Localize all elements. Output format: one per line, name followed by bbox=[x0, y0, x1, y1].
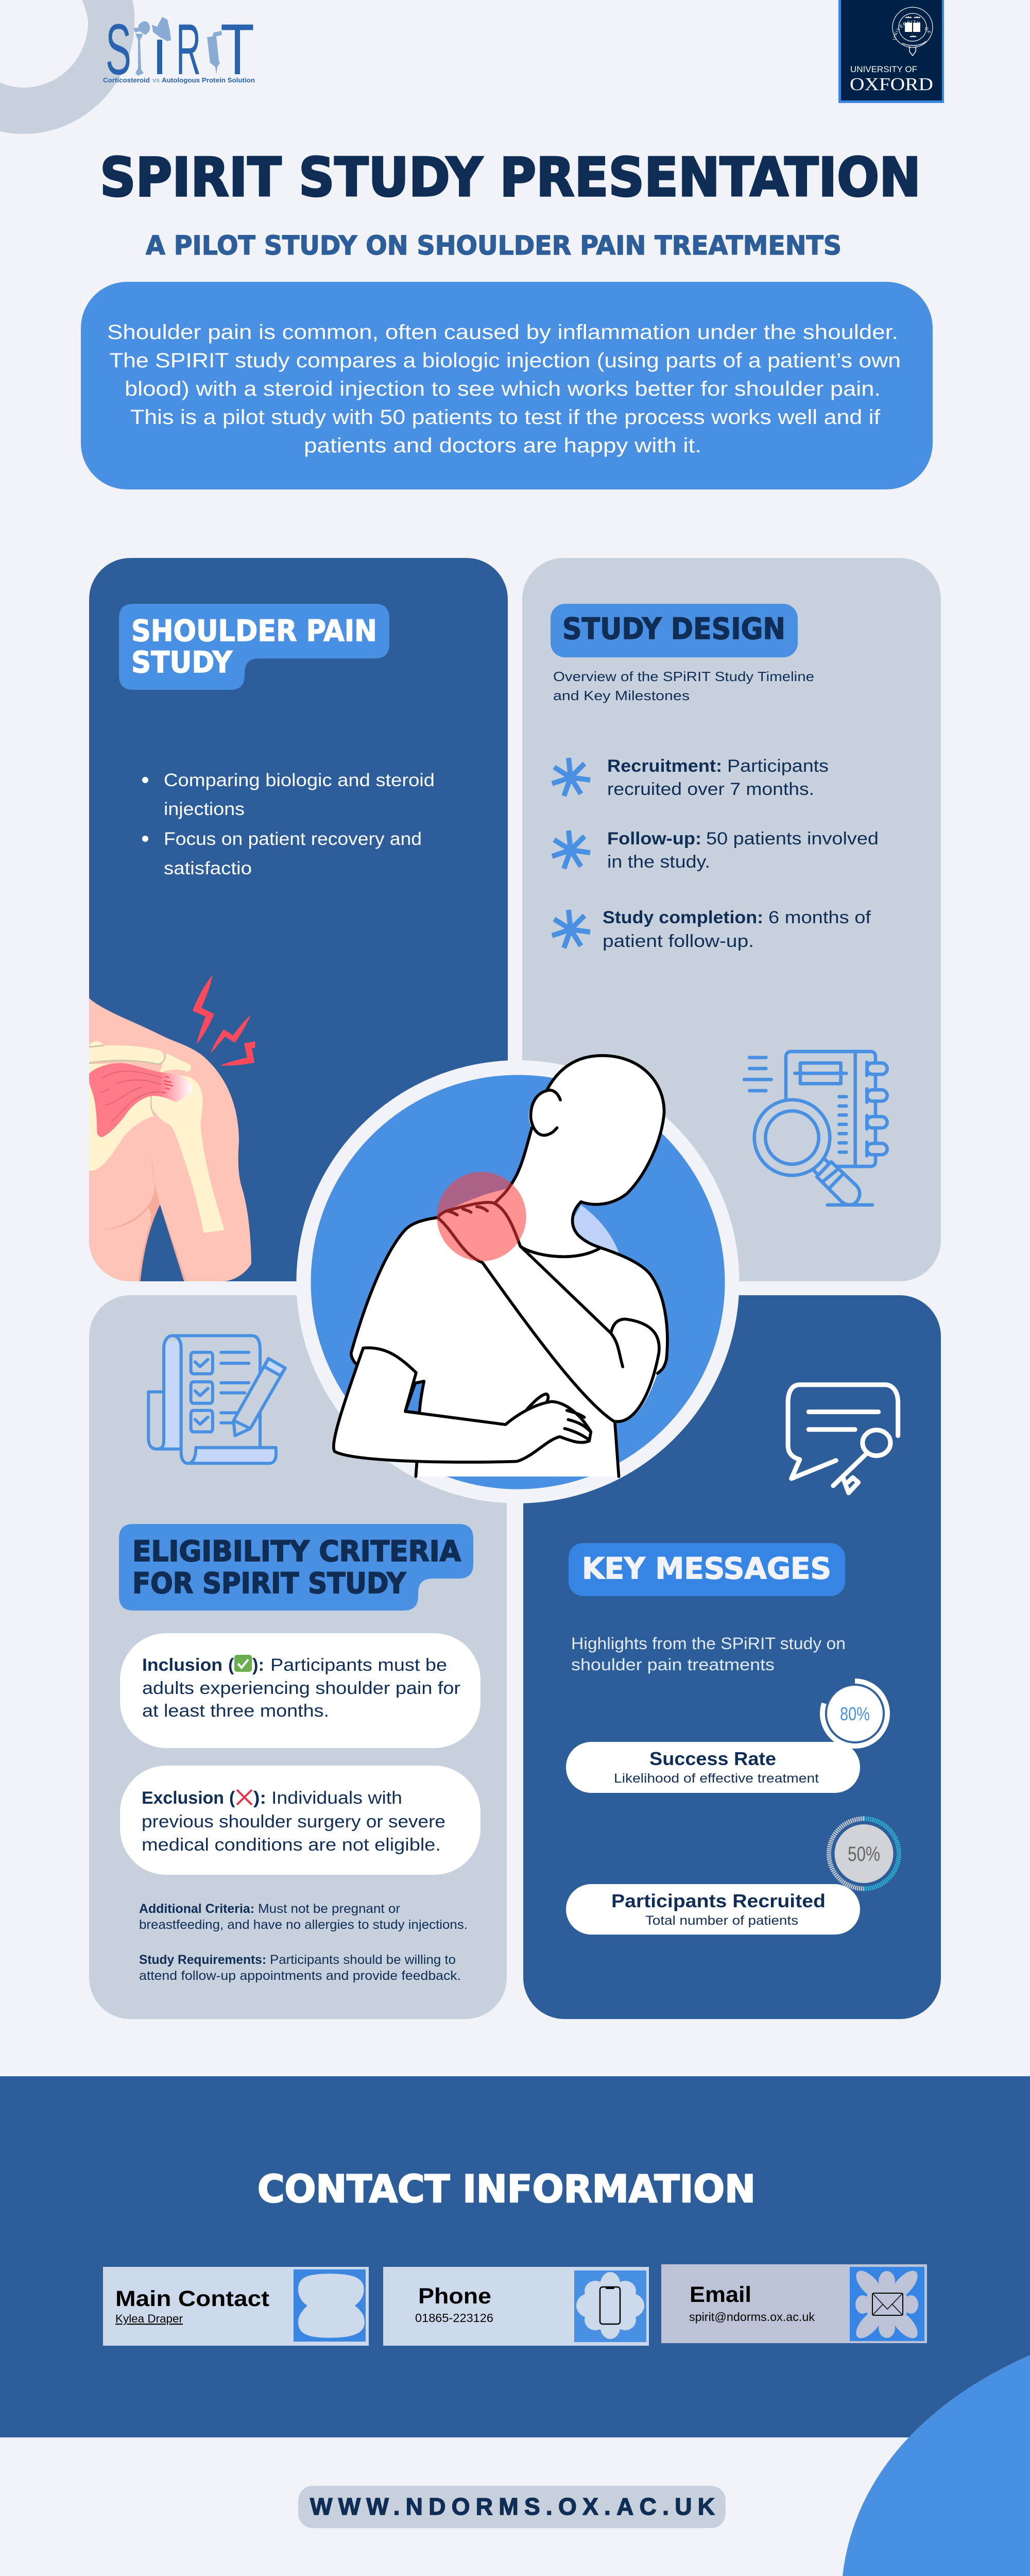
icon: speech bubble with key bbox=[788, 1385, 898, 1493]
study design intro text: and Key Milestones bbox=[553, 688, 690, 703]
card: email: spirit@ndorms.ox.ac.uk bbox=[689, 2310, 815, 2324]
icon: asterisk study completion bbox=[552, 910, 590, 948]
callout: exclusion: Exclusion bbox=[142, 1788, 224, 1808]
panel: shoulder pain study bbox=[77, 558, 508, 1281]
text: study completion: Study completion: bbox=[603, 908, 763, 927]
bullet list: injections bbox=[164, 799, 245, 819]
heading: key messages bbox=[569, 1543, 845, 1596]
website link bbox=[298, 2486, 726, 2528]
icon: red cross bbox=[237, 1790, 252, 1805]
text: follow-up: 50 patients involved bbox=[706, 829, 879, 849]
icon: two lobed shape bbox=[298, 2274, 365, 2338]
icon: checklist and pencil bbox=[148, 1335, 285, 1463]
text: study completion: 6 months of bbox=[768, 908, 871, 927]
stat: participants recruited: Participants Recruited bbox=[611, 1890, 826, 1911]
text: study requirements bbox=[139, 1953, 461, 1983]
callout: inclusion: adults experiencing shoulder pain for bbox=[142, 1679, 460, 1698]
heading: study design bbox=[551, 604, 798, 657]
heading: shoulder pain study bbox=[119, 604, 389, 690]
bullet list: satisfactio bbox=[164, 858, 252, 878]
text: recruitment: Participants bbox=[727, 756, 829, 776]
logo: SPIRIT: vs bbox=[152, 76, 160, 84]
bullet list: Comparing biologic and steroid bbox=[164, 770, 435, 790]
panel: eligibility criteria bbox=[89, 1295, 507, 2019]
card: phone: Phone bbox=[418, 2284, 491, 2309]
text: study requirements: Study Requirements: bbox=[139, 1953, 266, 1967]
callout: inclusion: Participants must be bbox=[270, 1655, 447, 1675]
heading: key messages: KEY MESSAGES bbox=[582, 1552, 831, 1586]
logo: SPIRIT: Autologous Protein Solution bbox=[162, 76, 255, 84]
study design intro text bbox=[553, 669, 814, 703]
stat: success rate bbox=[566, 1742, 860, 1793]
decorative ring top left bbox=[0, 0, 134, 134]
text: additional criteria: Must not be pregnant or bbox=[258, 1902, 400, 1916]
callout: exclusion: medical conditions are not eligible. bbox=[142, 1835, 441, 1855]
heading: shoulder pain study: SHOULDER PAIN bbox=[131, 614, 377, 648]
text: study completion bbox=[603, 908, 871, 951]
intro callout: blood) with a steroid injection to see which works better for shoulder pain. bbox=[125, 378, 881, 400]
gauge: 50 percent bbox=[829, 1819, 899, 1889]
text: additional criteria bbox=[139, 1902, 468, 1932]
callout: inclusion bbox=[120, 1633, 480, 1748]
callout: exclusion: ): bbox=[253, 1788, 266, 1808]
gauge: 80 percent: 80% bbox=[840, 1703, 870, 1724]
text: follow-up: in the study. bbox=[607, 852, 710, 872]
text: study requirements: attend follow-up appointments and provide feedback. bbox=[139, 1969, 461, 1983]
text: study completion: patient follow-up. bbox=[603, 931, 754, 951]
card: main contact: Kylea Draper bbox=[115, 2312, 183, 2325]
text: highlights bbox=[571, 1634, 846, 1674]
intro callout: Shoulder pain is common, often caused by inflammation under the shoulder. bbox=[107, 321, 898, 344]
text: follow-up bbox=[607, 829, 879, 872]
text: highlights: shoulder pain treatments bbox=[571, 1655, 775, 1674]
logo: SPIRIT bbox=[103, 9, 255, 90]
heading: shoulder pain study: STUDY bbox=[131, 646, 233, 680]
icon: asterisk recruitment bbox=[552, 758, 590, 796]
panel: study design bbox=[522, 558, 941, 1281]
decorative blue shape bottom right bbox=[843, 2355, 1030, 2576]
card: email: Email bbox=[690, 2282, 751, 2307]
figure: person holding shoulder bbox=[334, 1056, 667, 1477]
heading: eligibility criteria bbox=[119, 1524, 473, 1611]
center circle with figure bbox=[297, 1056, 740, 1503]
icon: green check bbox=[234, 1655, 252, 1672]
gauge: 80 percent bbox=[822, 1681, 887, 1746]
logo: SPIRIT: R bbox=[176, 9, 201, 90]
title: SPIRIT STUDY PRESENTATION bbox=[100, 147, 921, 209]
callout: exclusion bbox=[120, 1766, 480, 1875]
intro callout: This is a pilot study with 50 patients to test if the process works well and if bbox=[130, 406, 881, 429]
website link: WWW.NDORMS.OX.AC.UK bbox=[310, 2493, 715, 2520]
callout: inclusion: ( bbox=[228, 1655, 234, 1675]
bullet list bbox=[142, 770, 435, 878]
text: study requirements: Participants should be willing to bbox=[270, 1953, 456, 1967]
logo: SPIRIT: Corticosteroid bbox=[103, 76, 150, 84]
contact band bbox=[0, 2076, 1030, 2437]
callout: inclusion: Inclusion bbox=[142, 1655, 222, 1675]
intro callout bbox=[81, 282, 933, 489]
logo: University of Oxford: OXFORD bbox=[850, 74, 933, 94]
text: additional criteria: breastfeeding, and have no allergies to study injections. bbox=[139, 1918, 468, 1932]
stat: participants recruited bbox=[566, 1884, 860, 1935]
text: additional criteria: Additional Criteria: bbox=[139, 1902, 254, 1916]
callout: inclusion: at least three months. bbox=[142, 1701, 329, 1721]
text: highlights: Highlights from the SPiRIT study on bbox=[571, 1634, 846, 1653]
icon: flower with envelope bbox=[851, 2266, 922, 2343]
heading: contact information: CONTACT INFORMATION bbox=[258, 2167, 756, 2211]
icon: asterisk follow-up bbox=[552, 831, 590, 869]
bullet list: Focus on patient recovery and bbox=[164, 829, 422, 849]
stat: success rate: Success Rate bbox=[649, 1748, 776, 1769]
card: phone bbox=[383, 2267, 649, 2346]
card: email bbox=[661, 2264, 927, 2343]
text: recruitment: recruited over 7 months. bbox=[607, 779, 814, 799]
logo: University of Oxford bbox=[838, 0, 944, 103]
intro callout: The SPIRIT study compares a biologic injection (using parts of a patient’s own bbox=[109, 349, 901, 372]
card: phone: 01865-223126 bbox=[415, 2311, 493, 2325]
callout: exclusion: ( bbox=[229, 1788, 235, 1808]
stat: success rate: Likelihood of effective treatment bbox=[614, 1771, 819, 1786]
icon: notebook and magnifier bbox=[744, 1052, 887, 1205]
callout: inclusion: ): bbox=[252, 1655, 264, 1675]
intro callout: patients and doctors are happy with it. bbox=[304, 434, 701, 457]
text: recruitment bbox=[607, 756, 829, 799]
gauge: 50 percent: 50% bbox=[848, 1843, 880, 1866]
logo: SPIRIT: T bbox=[220, 9, 254, 90]
icon: flower with phone bbox=[576, 2272, 644, 2339]
logo: University of Oxford: UNIVERSITY OF bbox=[850, 64, 917, 74]
study design intro text: Overview of the SPiRIT Study Timeline bbox=[553, 669, 814, 684]
card: main contact bbox=[103, 2267, 369, 2346]
heading: study design: STUDY DESIGN bbox=[562, 612, 785, 646]
card: main contact: Main Contact bbox=[115, 2286, 269, 2311]
heading: eligibility criteria: FOR SPIRIT STUDY bbox=[132, 1567, 406, 1600]
stat: participants recruited: Total number of patients bbox=[645, 1913, 798, 1928]
panel: key messages bbox=[523, 1295, 941, 2019]
text: follow-up: Follow-up: bbox=[607, 829, 701, 849]
illustration: shoulder anatomy with pain bolts bbox=[77, 975, 255, 1281]
heading: eligibility criteria: ELIGIBILITY CRITERIA bbox=[132, 1535, 461, 1568]
subtitle: A PILOT STUDY ON SHOULDER PAIN TREATMENTS bbox=[146, 231, 842, 261]
text: recruitment: Recruitment: bbox=[607, 756, 722, 776]
callout: exclusion: Individuals with bbox=[271, 1788, 402, 1808]
callout: exclusion: previous shoulder surgery or severe bbox=[142, 1812, 445, 1832]
logo: SPIRIT: S bbox=[106, 9, 131, 90]
